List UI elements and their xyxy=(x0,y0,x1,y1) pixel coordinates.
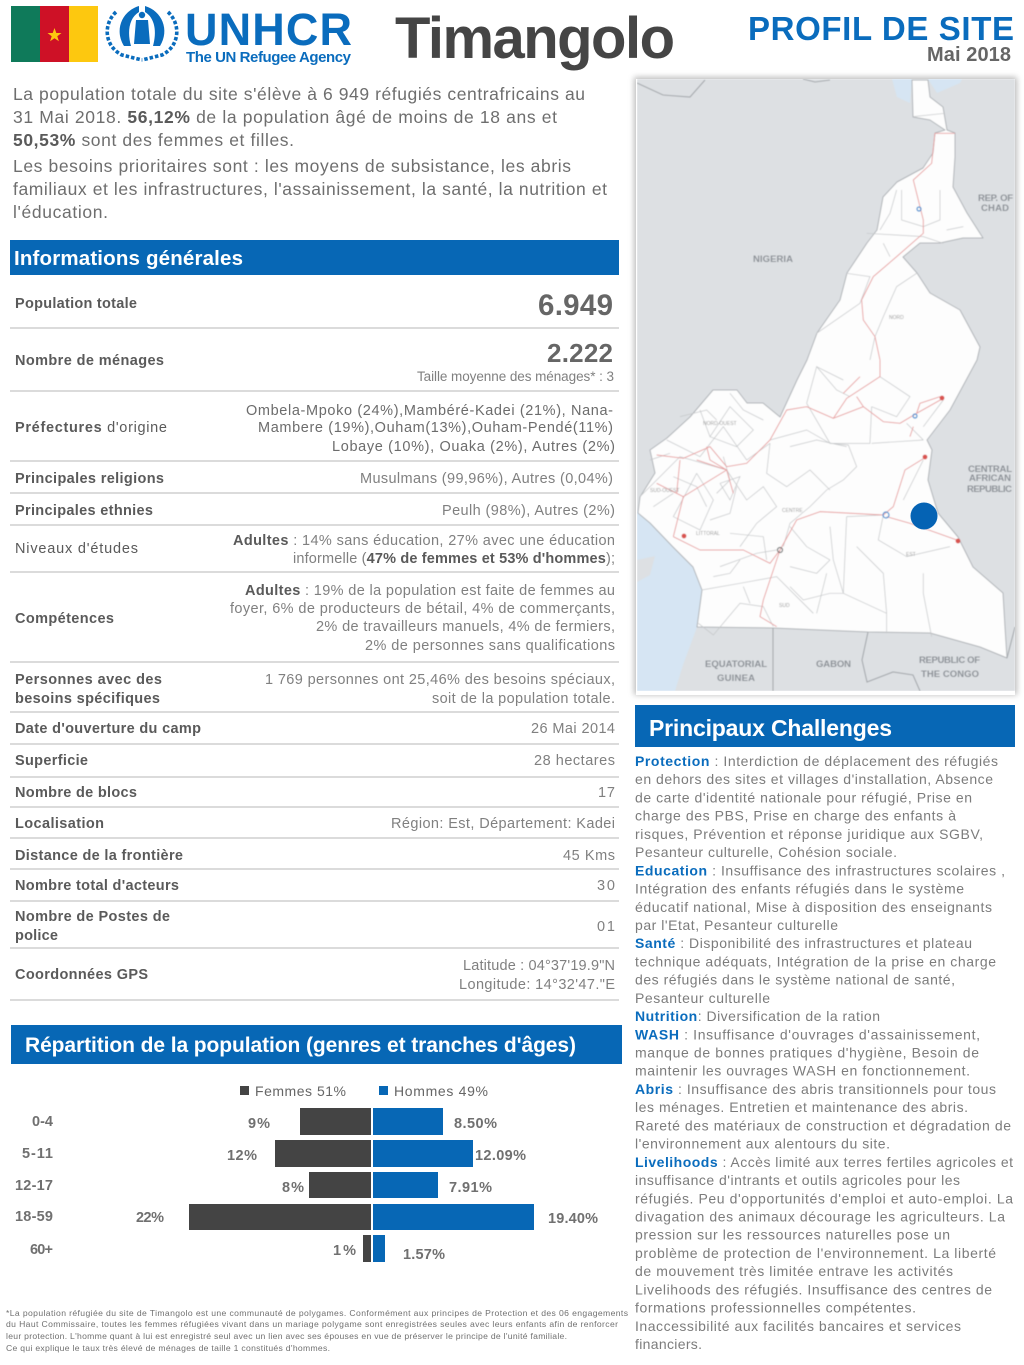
row: préfectures d'origine: Préfectures d'origine xyxy=(15,420,167,436)
row: niveaux d'études: Niveaux d'études xyxy=(15,541,138,557)
map: country labels: REPUBLIC OF xyxy=(919,655,980,666)
text: protection: Protection : Interdiction de déplacement des réfugiés xyxy=(635,753,998,769)
text: protection: de carte d'identité nationale pour réfugié, Prise en xyxy=(635,789,972,805)
text: WASH xyxy=(635,1026,980,1079)
panel: informations générales xyxy=(10,240,619,1000)
population pyramid bar chart: 9% xyxy=(248,1116,270,1132)
text: education xyxy=(635,862,1005,933)
row: distance de la frontière: 45 Kms xyxy=(563,848,615,864)
logo wordmark: UNHCR: UNHCR xyxy=(185,4,352,55)
text: santé: technique adéquats, Intégration de la prise en charge xyxy=(635,953,996,969)
row: population totale: 6.949 xyxy=(538,289,613,322)
row: population totale xyxy=(10,289,619,328)
logo tagline: The UN Refugee Agency xyxy=(186,49,352,66)
population pyramid bar chart: 22% xyxy=(136,1210,164,1226)
map: towns xyxy=(682,207,960,552)
row: nombre de postes de police: 01 xyxy=(597,919,615,935)
intro text block xyxy=(13,84,607,222)
text: education: par l'Etat, Pesanteur culturelle xyxy=(635,917,838,933)
text: livelihoods: formations professionnelles compétentes. xyxy=(635,1300,916,1316)
row: nombre total d'acteurs: 30 xyxy=(597,878,615,894)
text: WASH: WASH : Insuffisance d'ouvrages d'assainissement, xyxy=(635,1026,980,1042)
map: country labels: THE CONGO xyxy=(921,669,979,680)
row: localisation xyxy=(10,816,619,838)
row: personnes avec des besoins spécifiques: besoins spécifiques xyxy=(15,691,160,707)
row: préfectures d'origine: Ombela-Mpoko (24%),Mambéré-Kadei (21%), Nana- xyxy=(246,403,613,419)
row: nombre de ménages: 2.222 xyxy=(547,338,613,368)
map: region labels: LITTORAL xyxy=(696,531,720,537)
panel: principaux challenges xyxy=(635,705,1015,1352)
map: site location marker xyxy=(910,502,938,530)
map: main roads xyxy=(657,360,957,627)
map: country labels xyxy=(705,193,1013,684)
map: country labels: GUINEA xyxy=(717,673,755,684)
row: préfectures d'origine: Mambere (19%),Ouham(13%),Ouham-Pendé(11%) xyxy=(258,420,613,436)
text: livelihoods: financiers. xyxy=(635,1336,702,1352)
title: Timangolo xyxy=(395,6,675,71)
date: Mai 2018 xyxy=(927,44,1011,66)
text: livelihoods: pression sur les ressources naturelles pose un xyxy=(635,1227,950,1243)
map: region labels: NORD-OUEST xyxy=(703,421,737,427)
population pyramid bar chart: 12% xyxy=(227,1148,257,1164)
population pyramid bar chart: 12.09% xyxy=(475,1148,526,1164)
row: localisation: Localisation xyxy=(15,816,104,832)
population pyramid bar chart: 7.91% xyxy=(449,1180,492,1196)
chart legend xyxy=(240,1083,488,1099)
map: region labels: CENTRE xyxy=(782,508,803,514)
row: compétences: foyer, 6% de producteurs de bétail, 4% de commerçants, xyxy=(230,601,615,617)
row: date d'ouverture du camp xyxy=(10,721,619,744)
row: nombre de postes de police xyxy=(10,909,619,948)
population pyramid bar chart: 60+ xyxy=(30,1242,53,1258)
text: abris xyxy=(635,1081,1011,1152)
map: country labels: EQUATORIAL xyxy=(705,659,767,670)
row: coordonnées GPS: Latitude : 04°37'19.9"N xyxy=(463,958,615,974)
text: livelihoods: divagation des animaux décourage les agriculteurs. La xyxy=(635,1208,1005,1224)
text: WASH: manque de bonnes pratiques d'hygiène, Besoin de xyxy=(635,1044,979,1060)
text: livelihoods: Livelihoods des réfugiés. Insuffisance des centres de xyxy=(635,1281,992,1297)
text: education: éducatif national, Mise à disposition des enseignants xyxy=(635,899,992,915)
intro text block: 31 Mai 2018. 56,12% de la population âgé de moins de 18 ans et xyxy=(13,107,557,127)
icon: Cameroon flag xyxy=(11,6,98,62)
text: santé xyxy=(635,935,996,1006)
population pyramid bar chart: 19.40% xyxy=(548,1211,598,1227)
row: nombre de ménages xyxy=(10,338,619,391)
heading: profil de site: PROFIL DE SITE xyxy=(748,10,1014,47)
row: coordonnées GPS xyxy=(10,958,619,1000)
text: abris: Rareté des matériaux de construction et dégradation de xyxy=(635,1117,1011,1133)
row: nombre de blocs xyxy=(10,785,619,807)
row: niveaux d'études xyxy=(10,533,619,572)
text: abris: les ménages. Entretien et maintenance des abris. xyxy=(635,1099,968,1115)
row: nombre de blocs: Nombre de blocs xyxy=(15,785,137,801)
population pyramid bar chart: 18-59 xyxy=(15,1209,53,1225)
row: compétences xyxy=(10,583,619,662)
population pyramid bar chart: 8% xyxy=(282,1180,304,1196)
chart legend: Femmes 51% xyxy=(255,1083,346,1099)
row: coordonnées GPS: Coordonnées GPS xyxy=(15,967,148,983)
row: distance de la frontière: Distance de la frontière xyxy=(15,848,183,864)
icon: UNHCR emblem xyxy=(107,6,177,60)
text: livelihoods: insuffisance d'intrants et outils agricoles pour les xyxy=(635,1172,960,1188)
text: abris: l'environnement aux alentours du site. xyxy=(635,1136,890,1152)
population pyramid bar chart: 12-17 xyxy=(15,1178,53,1194)
row: personnes avec des besoins spécifiques: 1 769 personnes ont 25,46% des besoins spéciaux, xyxy=(265,672,615,688)
intro text block: familiaux et les infrastructures, l'assainissement, la santé, la nutrition et xyxy=(13,179,607,199)
row: nombre total d'acteurs xyxy=(10,878,619,901)
heading band: informations générales xyxy=(10,240,619,275)
footnote: Ce qui explique le taux très élevé de ménages de taille 1 constitués d'hommes. xyxy=(6,1343,330,1353)
row: localisation: Région: Est, Département: Kadei xyxy=(391,816,615,832)
row: principales ethnies: Peulh (98%), Autres (2%) xyxy=(442,503,615,519)
text: education: Education : Insuffisance des infrastructures scolaires , xyxy=(635,862,1005,878)
population pyramid bar chart: 1% xyxy=(333,1243,356,1259)
row: compétences: Adultes : 19% de la population est faite de femmes au xyxy=(245,583,615,599)
footnote xyxy=(6,1308,628,1353)
row: nombre de ménages: Taille moyenne des ménages* : 3 xyxy=(417,369,614,384)
chart legend: Hommes 49% xyxy=(394,1083,488,1099)
map: region labels xyxy=(650,315,916,609)
row: compétences: Compétences xyxy=(15,611,114,627)
map: region labels: NORD xyxy=(889,315,904,321)
map: Cameroon territory xyxy=(638,80,1007,658)
text: livelihoods: Livelihoods : Accès limité aux terres fertiles agricoles et xyxy=(635,1154,1013,1170)
row: niveaux d'études: Adultes : 14% sans éducation, 27% avec une éducation xyxy=(233,533,615,549)
population pyramid bar chart: 1.57% xyxy=(403,1247,445,1263)
intro text block: La population totale du site s'élève à 6 949 réfugiés centrafricains au xyxy=(13,84,585,104)
map: sea xyxy=(637,510,702,691)
row: coordonnées GPS: Longitude: 14°32'47."E xyxy=(459,977,615,993)
text: livelihoods: Inaccessibilité aux facilités bancaires et services xyxy=(635,1318,961,1334)
population pyramid bar chart: 5-11 xyxy=(22,1146,53,1162)
map: country labels: CHAD xyxy=(981,203,1009,214)
text: protection: Pesanteur culturelle, Cohésion sociale. xyxy=(635,844,897,860)
row: nombre de postes de police: police xyxy=(15,928,58,944)
row: principales ethnies: Principales ethnies xyxy=(15,503,153,519)
text: livelihoods: problème de protection de l'environnement. La liberté xyxy=(635,1245,996,1261)
row: personnes avec des besoins spécifiques: Personnes avec des xyxy=(15,672,162,688)
text: protection: charge des PBS, Prise en charge des enfants à xyxy=(635,808,956,824)
row: personnes avec des besoins spécifiques xyxy=(10,672,619,712)
heading band: informations générales: Informations générales xyxy=(14,247,243,270)
map: region labels: EST xyxy=(906,552,916,558)
text: abris: Abris : Insuffisance des abris transitionnels pour tous xyxy=(635,1081,996,1097)
text: livelihoods: réfugiés. Peu d'opportunités d'emploi et auto-emploi. La xyxy=(635,1190,1013,1206)
text: protection: risques, Prévention et réponse juridique aux SGBV, xyxy=(635,826,983,842)
row: superficie: 28 hectares xyxy=(534,753,615,769)
row: compétences: 2% de personnes sans qualifications xyxy=(365,638,615,654)
row: principales religions: Musulmans (99,96%), Autres (0,04%) xyxy=(360,471,613,487)
text: santé: Santé : Disponibilité des infrastructures et plateau xyxy=(635,935,972,951)
text: livelihoods: de mouvement très limitée entrave les activités xyxy=(635,1263,953,1279)
population pyramid bar chart: 8.50% xyxy=(454,1116,497,1132)
row: niveaux d'études: informelle (47% de femmes et 53% d'hommes); xyxy=(293,551,615,567)
map: lake Chad xyxy=(892,79,962,103)
map: country labels: REPUBLIC xyxy=(967,484,1012,495)
row: principales ethnies xyxy=(10,503,619,525)
text: santé: Pesanteur culturelle xyxy=(635,990,770,1006)
row: nombre de postes de police: Nombre de Postes de xyxy=(15,909,170,925)
row: préfectures d'origine: Lobaye (10%), Ouaka (2%), Autres (2%) xyxy=(332,439,615,455)
footnote: *La population réfugiée du site de Timangolo est une communauté de polygames. Conformément aux principes de Protection et des 06 engagements xyxy=(6,1308,628,1318)
row: date d'ouverture du camp: 26 Mai 2014 xyxy=(531,721,615,737)
footnote: leur protection. L'homme quant à lui est enregistré seul avec un lien avec ses épouses en vue de préserver le principe de l'unité familiale. xyxy=(6,1331,567,1341)
heading band: répartition de la population: Répartition de la population (genres et tranches d'âges) xyxy=(25,1034,576,1057)
heading band: répartition de la population xyxy=(11,1025,622,1064)
intro text block: Les besoins prioritaires sont : les moyens de subsistance, les abris xyxy=(13,156,571,176)
row: préfectures d'origine xyxy=(10,403,619,461)
row: nombre de blocs: 17 xyxy=(598,785,615,801)
map: administrative boundaries xyxy=(640,367,950,637)
population pyramid bar chart xyxy=(15,1108,598,1263)
map: country labels: REP. OF xyxy=(978,193,1013,204)
intro text block: l'éducation. xyxy=(13,202,108,222)
text: santé: des réfugiés dans le système national de santé, xyxy=(635,972,955,988)
map: country labels: NIGERIA xyxy=(753,254,793,265)
row: compétences: 2% de travailleurs manuels, 4% de fermiers, xyxy=(316,619,615,635)
row: superficie: Superficie xyxy=(15,753,88,769)
map: country labels: AFRICAN xyxy=(969,473,1011,484)
row: principales religions: Principales religions xyxy=(15,471,164,487)
row: nombre total d'acteurs: Nombre total d'acteurs xyxy=(15,878,179,894)
heading band: principaux challenges: Principaux Challenges xyxy=(649,715,892,741)
header xyxy=(11,4,1014,71)
text: nutrition: Nutrition: Diversification de la ration xyxy=(635,1008,880,1024)
panel: map of Cameroon xyxy=(634,77,1017,695)
population pyramid bar chart: 0-4 xyxy=(32,1114,53,1130)
map: region labels: SUD xyxy=(779,603,790,609)
row: personnes avec des besoins spécifiques: soit de la population totale. xyxy=(432,691,615,707)
row: population totale: Population totale xyxy=(15,296,137,312)
row: nombre de ménages: Nombre de ménages xyxy=(15,353,164,369)
row: distance de la frontière xyxy=(10,848,619,869)
text: protection: en dehors des sites et villages d'installation, Absence xyxy=(635,771,993,787)
text: WASH: maintenir les ouvrages WASH en fonctionnement. xyxy=(635,1063,970,1079)
heading band: principaux challenges xyxy=(635,705,1015,747)
intro text block: 50,53% sont des femmes et filles. xyxy=(13,130,294,150)
text: protection xyxy=(635,753,998,860)
map: region labels: SUD-OUEST xyxy=(650,488,679,494)
panel: répartition de la population xyxy=(11,1025,622,1263)
text: education: Intégration des enfants réfugiés dans le système xyxy=(635,880,964,896)
row: date d'ouverture du camp: Date d'ouverture du camp xyxy=(15,721,201,737)
footnote: du Haut Commissaire, toutes les femmes réfugiées vivant dans un mariage polygame sont enregistrées seules avec leurs enfants afin de renforcer xyxy=(6,1319,618,1329)
map: country labels: GABON xyxy=(816,659,851,670)
text: livelihoods xyxy=(635,1154,1013,1352)
map: neighbouring borders xyxy=(637,79,1015,691)
row: principales religions xyxy=(10,471,619,493)
map: country labels: CENTRAL xyxy=(968,464,1012,475)
row: superficie xyxy=(10,753,619,777)
